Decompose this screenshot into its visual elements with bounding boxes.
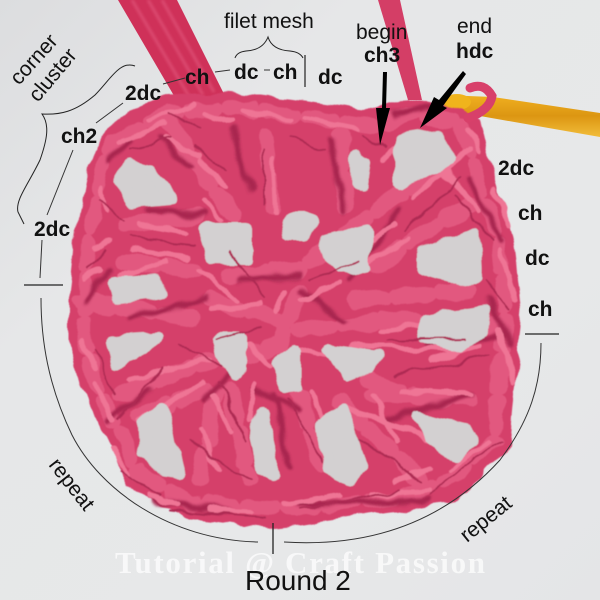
label: end hdc: hdc	[456, 40, 494, 63]
tick: round divider	[272, 523, 274, 554]
label: filet mesh	[224, 10, 343, 89]
label: filet mesh: dc	[234, 61, 259, 84]
label: left stitches: ch	[185, 66, 210, 89]
label: end hdc	[456, 15, 494, 63]
loop on hook	[468, 86, 492, 118]
crochet hook	[443, 94, 600, 137]
label: begin ch3: ch3	[364, 44, 400, 67]
label: right stitches: dc	[525, 247, 550, 270]
bracket: repeat right: repeat	[456, 491, 517, 547]
yarn tail right	[378, 0, 422, 100]
bracket: repeat left	[41, 298, 258, 542]
watermark: Tutorial @ Craft Passion	[115, 545, 485, 580]
label: right stitches: 2dc	[498, 157, 535, 180]
title: Round 2: Round 2	[245, 565, 351, 596]
arrow: end	[420, 71, 466, 128]
yarn tail left	[118, 0, 225, 106]
bracket: repeat left: repeat	[44, 454, 99, 515]
label: right stitches: ch	[528, 298, 553, 321]
label: begin ch3	[356, 21, 407, 67]
label: right stitches	[498, 157, 559, 334]
highlighted stitches	[82, 105, 515, 512]
dark stitch edges	[90, 115, 510, 518]
shadow strands	[85, 105, 510, 512]
label: corner cluster: corner	[6, 30, 63, 89]
holes	[112, 135, 485, 478]
label: begin ch3: begin	[356, 21, 407, 44]
label: end hdc: end	[457, 15, 492, 38]
round 1 and chain strands	[80, 108, 506, 510]
label: right stitches: ch	[518, 202, 543, 225]
bracket: repeat right	[284, 343, 541, 547]
arrow: begin	[376, 72, 390, 145]
crochet square	[72, 95, 518, 525]
label: left stitches: 2dc	[34, 218, 71, 241]
label: filet mesh: filet mesh	[224, 10, 314, 33]
label: left stitches: ch2	[61, 125, 97, 148]
label: filet mesh: dc	[318, 66, 343, 89]
label: filet mesh: ch	[273, 61, 298, 84]
label: corner cluster: cluster	[24, 44, 82, 106]
label: left stitches	[24, 66, 270, 285]
label: left stitches: 2dc	[125, 82, 162, 105]
label: corner cluster	[6, 30, 135, 224]
